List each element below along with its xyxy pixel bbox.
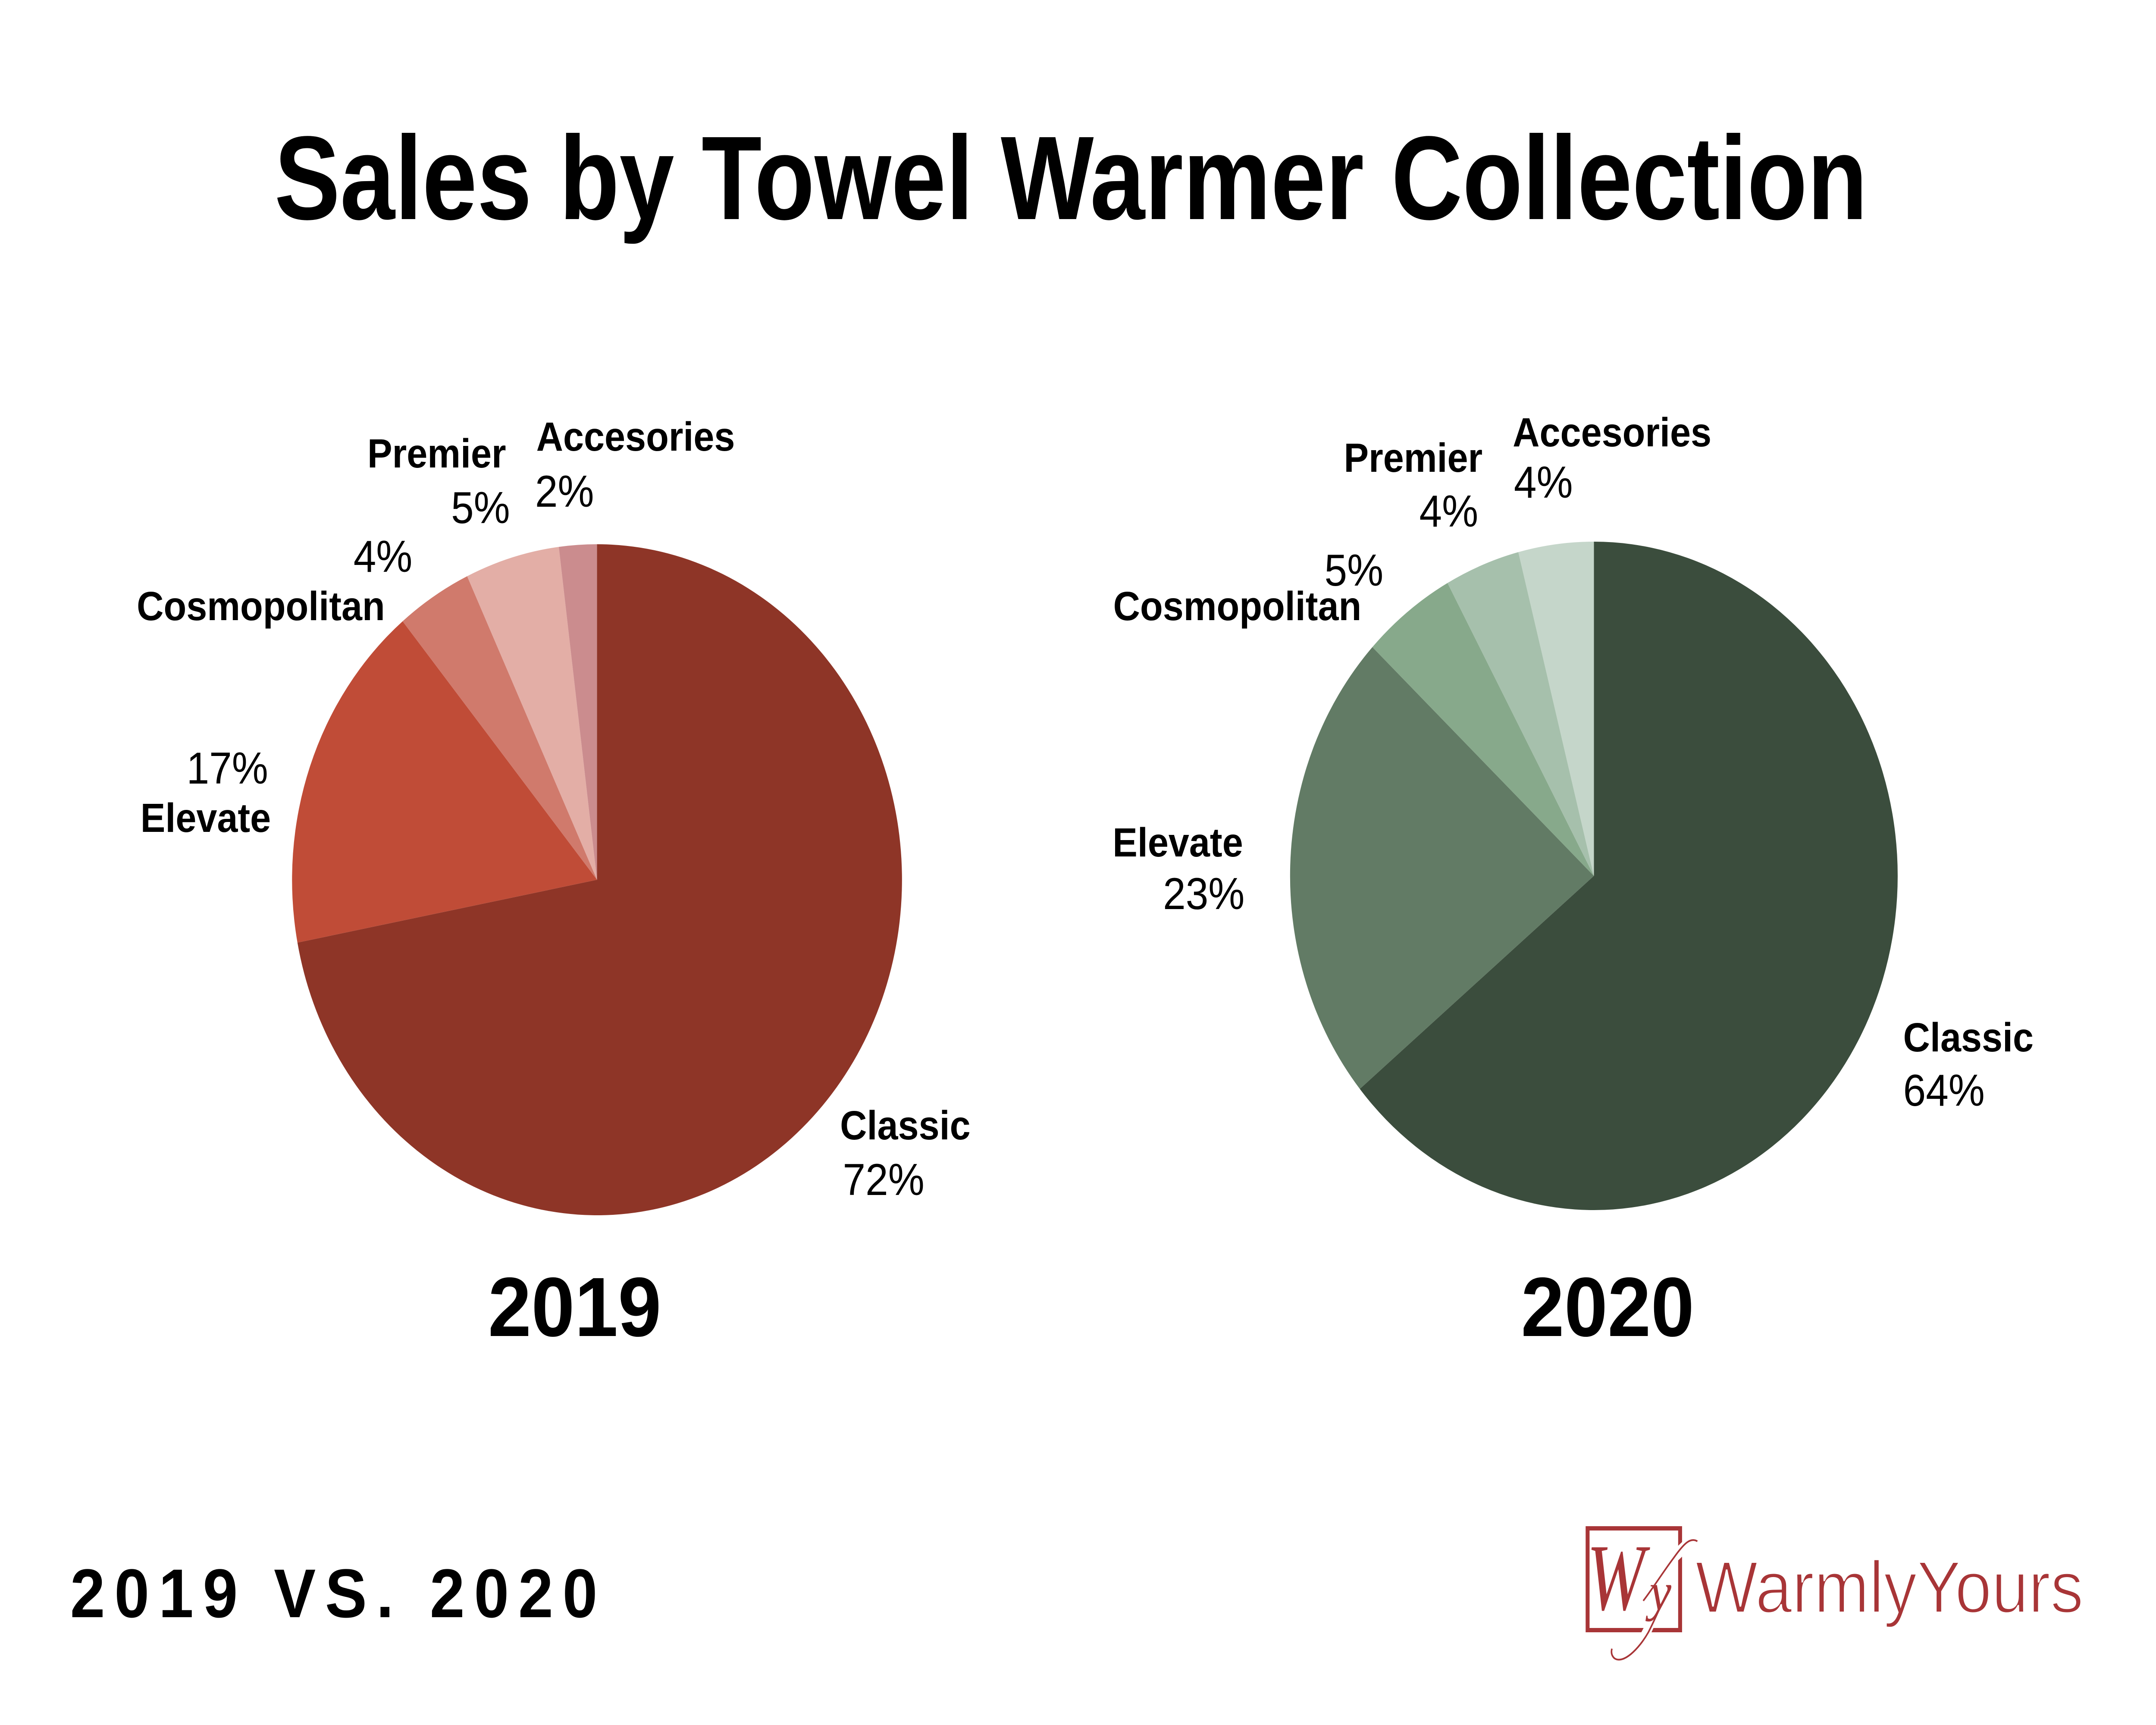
icon: square frame with Wy monogram — [1586, 1525, 1697, 1660]
label: Accesories 2020 — [1513, 410, 1711, 508]
label: Elevate 2020: Elevate — [1112, 820, 1243, 866]
slice: Cosmopolitan 5% — [1373, 583, 1594, 876]
label: Classic 2019 — [840, 1103, 971, 1205]
slice: Premier 5% — [467, 547, 597, 880]
slice: Classic 72% — [298, 544, 902, 1215]
slice: Premier 4% — [1448, 552, 1594, 876]
year heading: 2020: 2020 — [1521, 1260, 1694, 1354]
icon: square frame with Wy monogram: W — [1587, 1525, 1651, 1630]
wordmark: WarmlyYours — [1695, 1546, 2084, 1628]
label: Cosmopolitan 2019: 4% — [354, 532, 412, 582]
slice: Accesories 2% — [559, 544, 597, 880]
label: Premier 2020: Premier — [1344, 435, 1482, 481]
slice: Accesories 4% — [1518, 542, 1594, 876]
label: Classic 2019: Classic — [840, 1103, 971, 1148]
footer label: 2019 VS. 2020 — [70, 1556, 597, 1632]
label: Classic 2020 — [1903, 1015, 2034, 1116]
label: Classic 2020: Classic — [1903, 1015, 2034, 1060]
label: Accesories 2019: 2% — [535, 467, 594, 517]
pie chart: 2020 — [1290, 542, 1898, 1210]
label: Cosmopolitan 2020: 5% — [1325, 546, 1383, 596]
label: Accesories 2019: Accesories — [536, 414, 735, 460]
label: Elevate 2019: Elevate — [141, 795, 271, 841]
label: Classic 2019: 72% — [843, 1155, 924, 1205]
slice: Elevate 23% — [1290, 647, 1594, 1089]
title: Sales by Towel Warmer Collection — [274, 111, 1868, 245]
label: Cosmopolitan 2019: Cosmopolitan — [137, 583, 385, 629]
label: Premier 2020 — [1344, 435, 1482, 536]
slice: Classic 64% — [1360, 542, 1898, 1210]
label: Premier 2019: Premier — [367, 431, 506, 477]
label: Accesories 2020: Accesories — [1513, 410, 1711, 455]
label: Elevate 2020: 23% — [1163, 869, 1244, 919]
label: Premier 2019 — [367, 431, 510, 533]
label: Elevate 2019 — [141, 743, 271, 841]
slice: Elevate 17% — [292, 621, 597, 943]
slice: Cosmopolitan 4% — [403, 576, 597, 880]
label: Cosmopolitan 2019 — [137, 532, 412, 629]
year heading: 2019: 2019 — [488, 1260, 661, 1354]
label: Accesories 2020: 4% — [1514, 458, 1573, 508]
panel: 2019 chart — [137, 414, 971, 1354]
label: Premier 2020: 4% — [1420, 486, 1478, 536]
label: Elevate 2019: 17% — [187, 743, 268, 794]
label: Accesories 2019 — [535, 414, 735, 517]
label: Elevate 2020 — [1112, 820, 1244, 919]
label: Premier 2019: 5% — [451, 483, 510, 533]
pie chart: 2019 — [292, 544, 902, 1215]
label: Cosmopolitan 2020 — [1113, 546, 1383, 629]
logo: WarmlyYours — [1586, 1525, 2084, 1660]
label: Cosmopolitan 2020: Cosmopolitan — [1113, 583, 1361, 629]
icon: square frame with Wy monogram: y — [1645, 1562, 1672, 1622]
label: Classic 2020: 64% — [1903, 1066, 1985, 1116]
panel: 2020 chart — [1112, 410, 2034, 1354]
